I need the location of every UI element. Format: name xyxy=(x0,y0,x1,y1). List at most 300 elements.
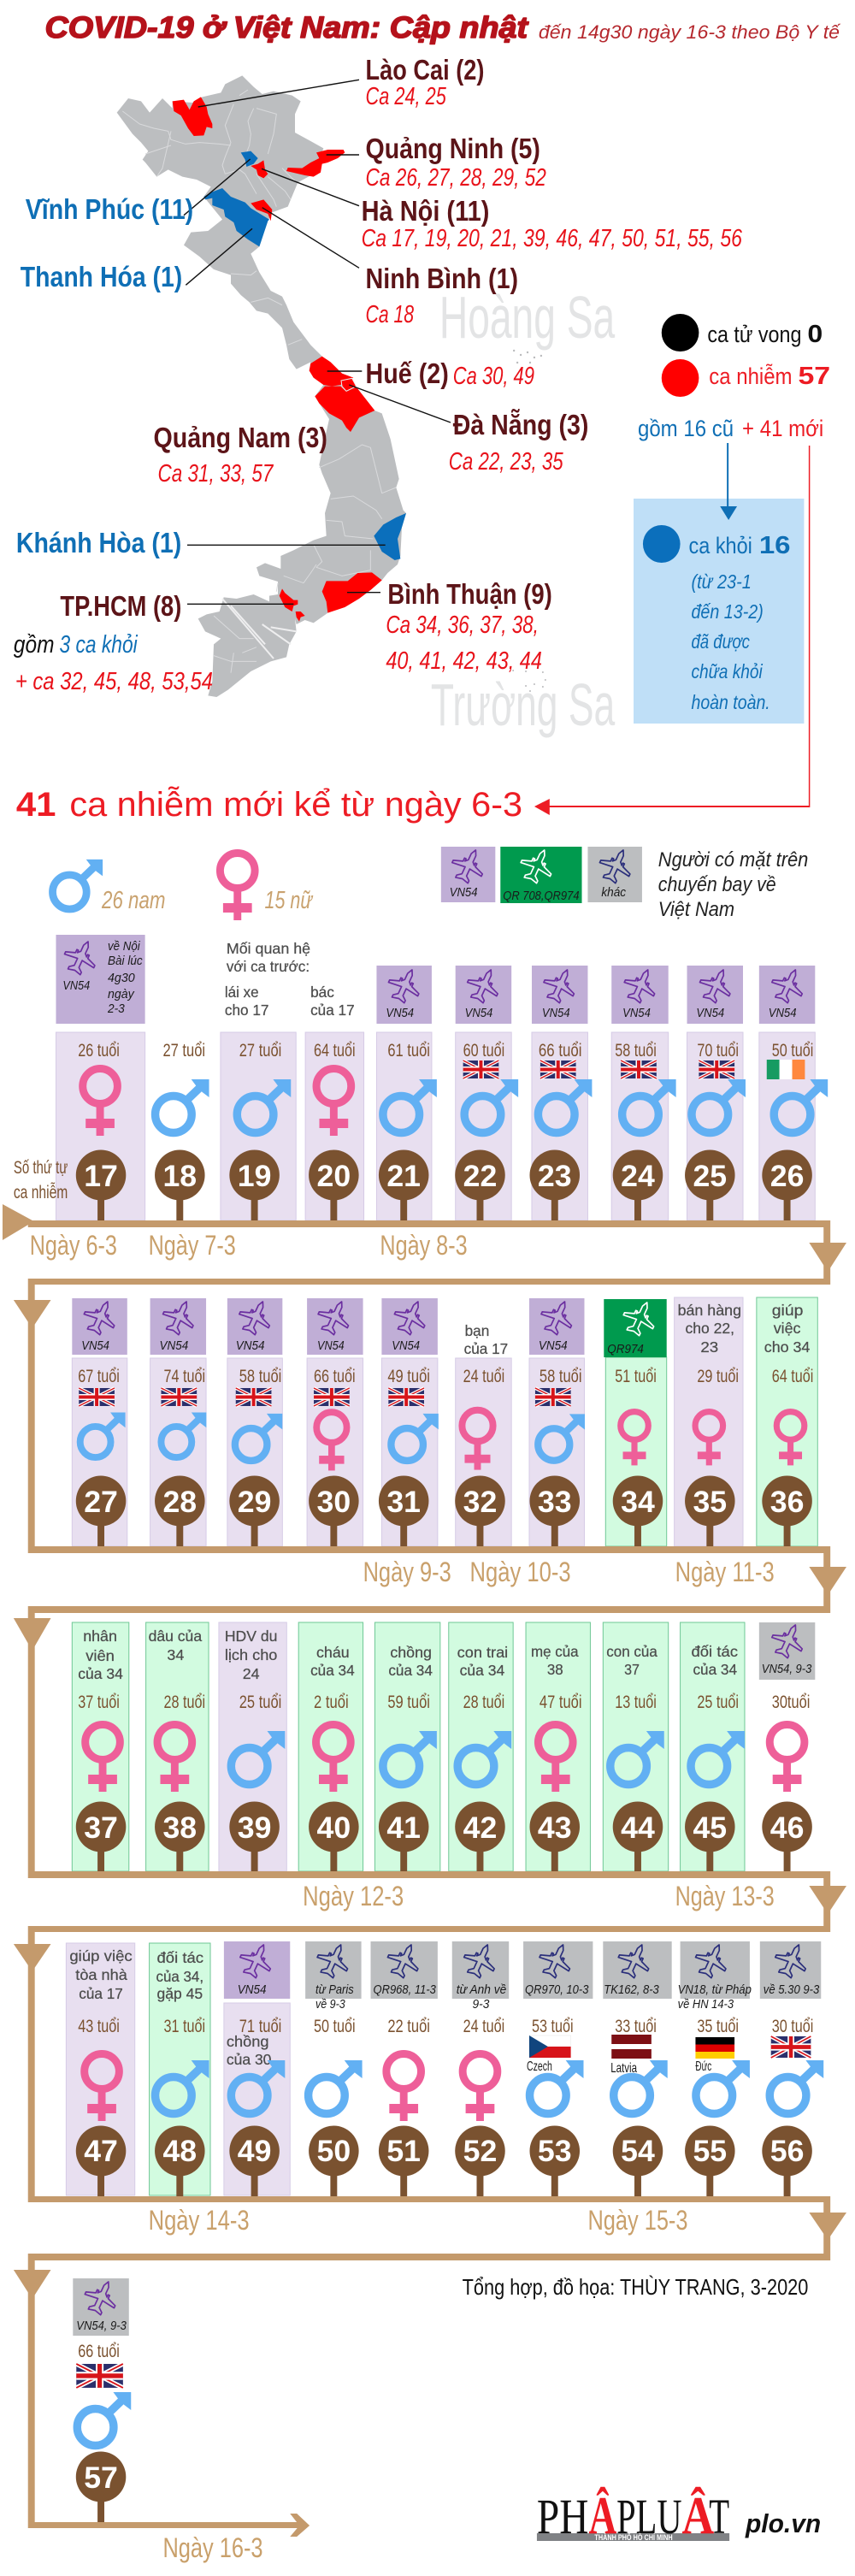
pin: 53 xyxy=(538,2135,572,2168)
gender xyxy=(776,1412,805,1465)
label: TP.HCM: + ca 32, 45, 48, 53,54 xyxy=(15,668,213,695)
relation: viên xyxy=(86,1647,115,1664)
pin xyxy=(762,1149,812,1221)
date labels: Ngày 13-3 xyxy=(675,1881,775,1911)
case 43 xyxy=(526,1622,590,1873)
relation: đối tác xyxy=(691,1643,738,1660)
case 20 xyxy=(305,984,364,1221)
pin xyxy=(155,1149,205,1221)
relation: của 34, xyxy=(156,1968,203,1985)
flag: UK xyxy=(388,1388,424,1406)
pin: 25 xyxy=(693,1160,727,1193)
pin xyxy=(76,1149,126,1221)
relation note: với ca trước: xyxy=(227,958,310,975)
pin: 42 xyxy=(463,1811,497,1845)
label: Bình Thuận xyxy=(386,578,552,675)
case 34 xyxy=(604,1296,667,1547)
case 27 xyxy=(72,1295,127,1547)
case 39 xyxy=(219,1622,286,1873)
province: Quảng Ninh xyxy=(286,150,345,177)
age: 24 tuổi xyxy=(463,2017,504,2036)
watermark: Hoàng Sa: Hoàng Sa xyxy=(439,284,615,351)
pin: 55 xyxy=(693,2135,727,2168)
relation xyxy=(764,1302,810,1356)
pin: 50 xyxy=(317,2135,351,2168)
relation: của 17 xyxy=(464,1340,508,1357)
flight legend note: chuyến bay về xyxy=(658,873,776,896)
gender xyxy=(462,1410,493,1470)
pin xyxy=(76,1801,126,1873)
pin xyxy=(309,1801,359,1873)
case 36 xyxy=(757,1297,817,1547)
relation: bạn xyxy=(465,1322,489,1339)
age: 74 tuổi xyxy=(163,1367,205,1386)
flag: UK xyxy=(236,1388,271,1406)
relation: cho 34 xyxy=(764,1338,810,1356)
pin xyxy=(379,2126,428,2197)
legend: deaths: ca tử vong xyxy=(707,322,801,347)
flight box xyxy=(611,963,669,1024)
islands: Trường Sa xyxy=(512,670,546,692)
age: 61 tuổi xyxy=(387,1041,430,1061)
flight box: Bài lúc xyxy=(108,954,143,968)
recovered heading: 16 xyxy=(759,532,791,559)
flight box xyxy=(760,1938,821,1999)
flight box xyxy=(452,1938,509,2012)
flight box: về 9-3 xyxy=(315,1997,345,2012)
flight box: VN54 xyxy=(62,978,90,993)
flight box xyxy=(305,1938,362,2012)
flight box xyxy=(224,1938,290,1999)
case 50 xyxy=(305,1938,363,2197)
age: 66 tuổi xyxy=(314,1367,356,1386)
flight box: VN54 xyxy=(386,1006,414,1020)
case 57 xyxy=(73,2275,131,2523)
relation xyxy=(388,1644,433,1679)
pin: 46 xyxy=(770,1811,804,1845)
age: 60 tuổi xyxy=(463,1041,504,1061)
flight legend: QR: QR 708,QR974 xyxy=(503,889,580,903)
pin: 48 xyxy=(162,2135,197,2168)
pin xyxy=(229,2126,280,2197)
pin xyxy=(309,1476,359,1547)
case 55 xyxy=(678,1938,752,2197)
pin xyxy=(530,1801,580,1873)
case 23 xyxy=(530,963,592,1221)
gender xyxy=(316,1724,351,1792)
case 48 xyxy=(150,1943,210,2197)
age: 22 tuổi xyxy=(387,2017,430,2036)
flight box: VN18, từ Pháp xyxy=(678,1982,752,1997)
age: 49 tuổi xyxy=(387,1367,430,1386)
gender xyxy=(530,2060,583,2114)
flag: UK xyxy=(699,1061,734,1078)
relation: của 17 xyxy=(79,1985,123,2002)
gender xyxy=(622,1079,676,1132)
pin: 56 xyxy=(770,2135,804,2168)
recovered note: đến 13-2) xyxy=(691,600,764,623)
recovered note: chữa khỏi xyxy=(691,660,764,682)
pin: 32 xyxy=(463,1486,497,1519)
relation xyxy=(227,2033,271,2068)
pin: 19 xyxy=(238,1160,271,1193)
pin xyxy=(613,2126,663,2197)
recovered heading: ca khỏi xyxy=(689,533,752,558)
logo: Pháp Luật: Â xyxy=(682,2487,715,2545)
label: Đà Nẵng xyxy=(449,408,588,476)
pin: 43 xyxy=(538,1811,572,1845)
relation xyxy=(531,1643,579,1678)
pin xyxy=(379,1149,428,1221)
flight box xyxy=(56,935,145,1024)
label: Ninh Bình: Ninh Bình (1) xyxy=(366,263,518,294)
relation xyxy=(678,1302,741,1356)
gender xyxy=(80,1413,126,1457)
pin: 28 xyxy=(162,1486,197,1519)
flight box xyxy=(603,1938,672,1999)
islands: Hoàng Sa xyxy=(513,350,542,363)
case 21 xyxy=(376,963,437,1221)
flight legend: QR xyxy=(500,843,582,903)
flag: UK xyxy=(463,1061,498,1078)
flight box: từ Anh về xyxy=(457,1982,506,1997)
flight box xyxy=(150,1295,206,1355)
pin xyxy=(530,1149,580,1221)
legend: deaths: 0 xyxy=(807,321,823,348)
gender xyxy=(463,2054,498,2121)
age: 70 tuổi xyxy=(697,1041,739,1061)
label: Lào Cai xyxy=(366,54,484,110)
relation xyxy=(78,1628,123,1682)
pin xyxy=(762,2126,812,2197)
watermark: Trường Sa: Trường Sa xyxy=(431,671,615,738)
gender xyxy=(538,1414,585,1461)
label: Quảng Nam: Ca 31, 33, 57 xyxy=(158,460,274,487)
pin xyxy=(309,1149,359,1221)
pin: 29 xyxy=(238,1486,271,1519)
label: Huế: Huế (2) xyxy=(366,357,449,389)
age: 71 tuổi xyxy=(239,2017,281,2036)
date labels: Ngày 12-3 xyxy=(303,1881,404,1911)
flag: UK xyxy=(771,2036,811,2058)
flight box: VN54 xyxy=(769,1006,796,1020)
relation xyxy=(225,1628,277,1682)
relation: nhân xyxy=(83,1628,117,1645)
pin: 38 xyxy=(162,1811,197,1845)
label: Huế xyxy=(366,357,534,390)
arrow: end xyxy=(290,2514,310,2537)
label: Quảng Ninh: Ca 26, 27, 28, 29, 52 xyxy=(366,164,546,192)
case 45 xyxy=(681,1622,745,1873)
flag: UK xyxy=(76,2364,123,2388)
gender legend: female: 15 nữ xyxy=(265,887,313,914)
province: Hà Nội xyxy=(251,160,268,178)
age: 28 tuổi xyxy=(463,1693,504,1712)
arrow: to recovered xyxy=(720,443,737,520)
age: 31 tuổi xyxy=(163,2017,205,2036)
pin xyxy=(76,2126,126,2197)
label: Hà Nội: Hà Nội (11) xyxy=(362,195,489,227)
date labels: Ngày 9-3 xyxy=(363,1557,451,1587)
flag: Latvia xyxy=(610,2035,652,2076)
case 35 xyxy=(675,1297,743,1547)
gender xyxy=(391,1414,439,1461)
case 47 xyxy=(66,1943,135,2197)
pin xyxy=(455,2126,505,2197)
flight box: về HN 14-3 xyxy=(678,1997,734,2012)
flight box: ngày xyxy=(108,987,135,1001)
pin xyxy=(685,1149,735,1221)
gender xyxy=(383,1731,437,1784)
flag: Germany: Đức xyxy=(695,2059,711,2074)
gender xyxy=(383,1079,437,1132)
label: Vĩnh Phúc: Vĩnh Phúc (11) xyxy=(26,193,193,225)
pin: 33 xyxy=(538,1486,572,1519)
pin: 26 xyxy=(770,1160,804,1193)
age: 51 tuổi xyxy=(615,1367,657,1386)
flag: Czech: Czech xyxy=(527,2059,552,2074)
case 29 xyxy=(227,1295,282,1547)
pin: 36 xyxy=(770,1486,804,1519)
pin: 17 xyxy=(84,1160,118,1193)
age: 64 tuổi xyxy=(314,1041,356,1061)
flight box: VN54, 9-3 xyxy=(762,1662,812,1676)
pin: 40 xyxy=(317,1811,351,1845)
case 28 xyxy=(150,1295,206,1547)
case 38 xyxy=(146,1622,209,1873)
gender xyxy=(692,1079,746,1132)
gender xyxy=(156,1079,209,1132)
pin xyxy=(455,1476,505,1547)
gender xyxy=(770,1724,805,1792)
relation xyxy=(457,1644,508,1679)
flight box xyxy=(523,1938,593,1999)
label: TP.HCM: gồm xyxy=(14,631,54,659)
flight box: từ Paris xyxy=(315,1982,354,1997)
age: 43 tuổi xyxy=(78,2017,120,2036)
date labels: Ngày 15-3 xyxy=(587,2205,688,2236)
label: TP.HCM: TP.HCM (8) xyxy=(60,590,181,622)
pin xyxy=(455,1149,505,1221)
case 53 xyxy=(523,1938,593,2197)
gender xyxy=(464,1079,518,1132)
gender xyxy=(614,2060,668,2114)
case 31 xyxy=(379,1295,439,1547)
title: COVID-19 ở Việt Nam: Cập nhật xyxy=(45,11,529,44)
relation: bác xyxy=(310,984,334,1001)
flight box xyxy=(72,1295,127,1355)
relation xyxy=(464,1322,508,1357)
age: 66 tuổi xyxy=(78,2342,120,2361)
gender xyxy=(316,1069,351,1136)
pin: 20 xyxy=(317,1160,351,1193)
relation: dâu của xyxy=(149,1628,202,1645)
age: 59 tuổi xyxy=(387,1693,430,1712)
pin: 45 xyxy=(693,1811,727,1845)
province: TP.HCM xyxy=(280,588,305,622)
label: Hà Nội xyxy=(362,195,743,252)
date labels: Ngày 14-3 xyxy=(149,2205,250,2236)
case 32 xyxy=(455,1322,511,1547)
pin: 37 xyxy=(84,1811,118,1845)
gender xyxy=(86,1724,120,1792)
logo: Pháp Luật: Â xyxy=(588,2487,616,2545)
label: Bình Thuận: Bình Thuận (9) xyxy=(387,578,552,610)
pin xyxy=(155,1801,205,1873)
age: 64 tuổi xyxy=(772,1367,813,1386)
pin: 30 xyxy=(317,1486,351,1519)
age: 58 tuổi xyxy=(540,1367,582,1386)
gender xyxy=(696,2060,750,2114)
flight box: VN54, 9-3 xyxy=(76,2319,127,2333)
gender xyxy=(770,2060,823,2114)
flight box: VN54 xyxy=(539,1338,568,1353)
flight box xyxy=(456,963,511,1024)
age: 58 tuổi xyxy=(239,1367,281,1386)
relation: gặp 45 xyxy=(157,1985,203,2002)
legend: infected: 57 xyxy=(798,363,830,390)
logo: Pháp Luật xyxy=(537,2487,821,2545)
pin: 34 xyxy=(621,1486,655,1519)
pin: 21 xyxy=(386,1160,421,1193)
leader lines xyxy=(184,80,451,604)
flight box: QR974 xyxy=(607,1342,644,1356)
label: Ninh Bình xyxy=(366,263,518,328)
heading: new cases: 41 xyxy=(16,786,56,824)
relation: của 34 xyxy=(310,1662,355,1679)
relation: HDV du xyxy=(225,1628,277,1645)
pin: 47 xyxy=(84,2135,118,2168)
pin xyxy=(613,1149,663,1221)
relation xyxy=(691,1643,738,1678)
flight box xyxy=(376,963,432,1024)
relation: 24 xyxy=(243,1665,260,1682)
date labels: Ngày 10-3 xyxy=(470,1557,571,1587)
flight box xyxy=(381,1295,438,1355)
date labels: Ngày 11-3 xyxy=(675,1557,775,1587)
label: Thanh Hóa: Thanh Hóa (1) xyxy=(21,261,182,292)
pin xyxy=(229,1149,280,1221)
gender xyxy=(77,2392,131,2446)
legend: breakdown xyxy=(638,416,823,441)
flag: Latvia: Latvia xyxy=(610,2061,637,2076)
age: 33 tuổi xyxy=(615,2017,657,2036)
case 54 xyxy=(603,1938,672,2197)
pin: 39 xyxy=(238,1811,271,1845)
flag: UK xyxy=(314,1388,350,1406)
case 41 xyxy=(374,1622,440,1873)
province labels xyxy=(14,54,743,695)
pin xyxy=(229,1476,280,1547)
gender xyxy=(457,1731,511,1784)
age: 25 tuổi xyxy=(697,1693,739,1712)
gender legend: male xyxy=(53,860,165,914)
relation: của 34 xyxy=(460,1662,504,1679)
legend: infected: ca nhiễm xyxy=(709,363,793,389)
label: Đà Nẵng: Đà Nẵng (3) xyxy=(453,408,588,440)
recovered icon xyxy=(643,525,681,563)
age: 47 tuổi xyxy=(540,1693,582,1712)
relation: cho 22, xyxy=(686,1320,734,1337)
case 46 xyxy=(759,1618,815,1873)
relation note xyxy=(227,940,310,975)
relation xyxy=(149,1628,202,1663)
case 17 xyxy=(56,935,145,1221)
gender xyxy=(316,1412,347,1470)
gender xyxy=(309,2060,363,2114)
label: Lào Cai: Lào Cai (2) xyxy=(366,54,484,86)
pin: 35 xyxy=(693,1486,727,1519)
relation: con trai xyxy=(457,1644,508,1661)
case 51 xyxy=(371,1938,438,2197)
pin xyxy=(613,1801,663,1873)
age: 53 tuổi xyxy=(532,2017,574,2036)
flight box: về Nội xyxy=(108,939,140,954)
pin: 57 xyxy=(84,2461,118,2495)
age: 67 tuổi xyxy=(78,1367,120,1386)
gender xyxy=(231,1731,285,1784)
pin xyxy=(379,1476,428,1547)
gender xyxy=(156,2060,209,2114)
flag: UK xyxy=(79,1388,115,1406)
pin xyxy=(309,2126,359,2197)
relation: của 17 xyxy=(310,1001,355,1019)
flight box: QR970, 10-3 xyxy=(525,1982,589,1997)
age: 50 tuổi xyxy=(772,1041,813,1061)
pin xyxy=(530,2126,580,2197)
relation xyxy=(310,1644,355,1679)
legend: breakdown: gồm 16 cũ xyxy=(638,416,734,441)
province: Bình Thuận xyxy=(322,572,382,613)
label: TP.HCM: 3 ca khỏi xyxy=(59,631,139,659)
pin: 49 xyxy=(238,2135,271,2168)
gender xyxy=(237,1079,291,1132)
legend: breakdown: + 41 mới xyxy=(742,416,823,441)
recovered heading xyxy=(689,532,791,559)
province: Ninh Bình xyxy=(251,199,272,221)
pin xyxy=(762,1801,812,1873)
relation: lịch cho xyxy=(225,1646,277,1663)
relation: của 34 xyxy=(388,1662,433,1679)
pin: 54 xyxy=(621,2135,655,2168)
case 25 xyxy=(685,963,746,1221)
arrows: right side xyxy=(809,1243,846,2240)
relation: chồng xyxy=(227,2033,268,2050)
gender legend: female xyxy=(220,854,313,920)
gender xyxy=(231,2060,285,2114)
flight box xyxy=(532,963,587,1024)
relation: của 34 xyxy=(693,1661,737,1678)
gender xyxy=(157,1724,192,1792)
legend: infected xyxy=(662,359,830,397)
label: Quảng Ninh xyxy=(366,133,546,192)
gender xyxy=(610,1731,664,1784)
pin: 22 xyxy=(463,1160,497,1193)
age: 58 tuổi xyxy=(615,1041,657,1061)
label: Hà Nội: Ca 17, 19, 20, 21, 39, 46, 47, 50, 51, 55, 56 xyxy=(362,225,743,252)
flight box xyxy=(759,1618,815,1680)
relation: giúp việc xyxy=(69,1947,133,1964)
label: TP.HCM xyxy=(14,590,213,695)
pin: 41 xyxy=(386,1811,421,1845)
recovered note xyxy=(691,570,770,713)
relation: giúp xyxy=(772,1302,803,1319)
province: Thanh Hóa xyxy=(203,188,269,246)
recovered note: đã được xyxy=(691,630,750,653)
age: 27 tuổi xyxy=(239,1041,281,1061)
flag: UK xyxy=(540,1061,576,1078)
flight box xyxy=(529,1295,584,1355)
